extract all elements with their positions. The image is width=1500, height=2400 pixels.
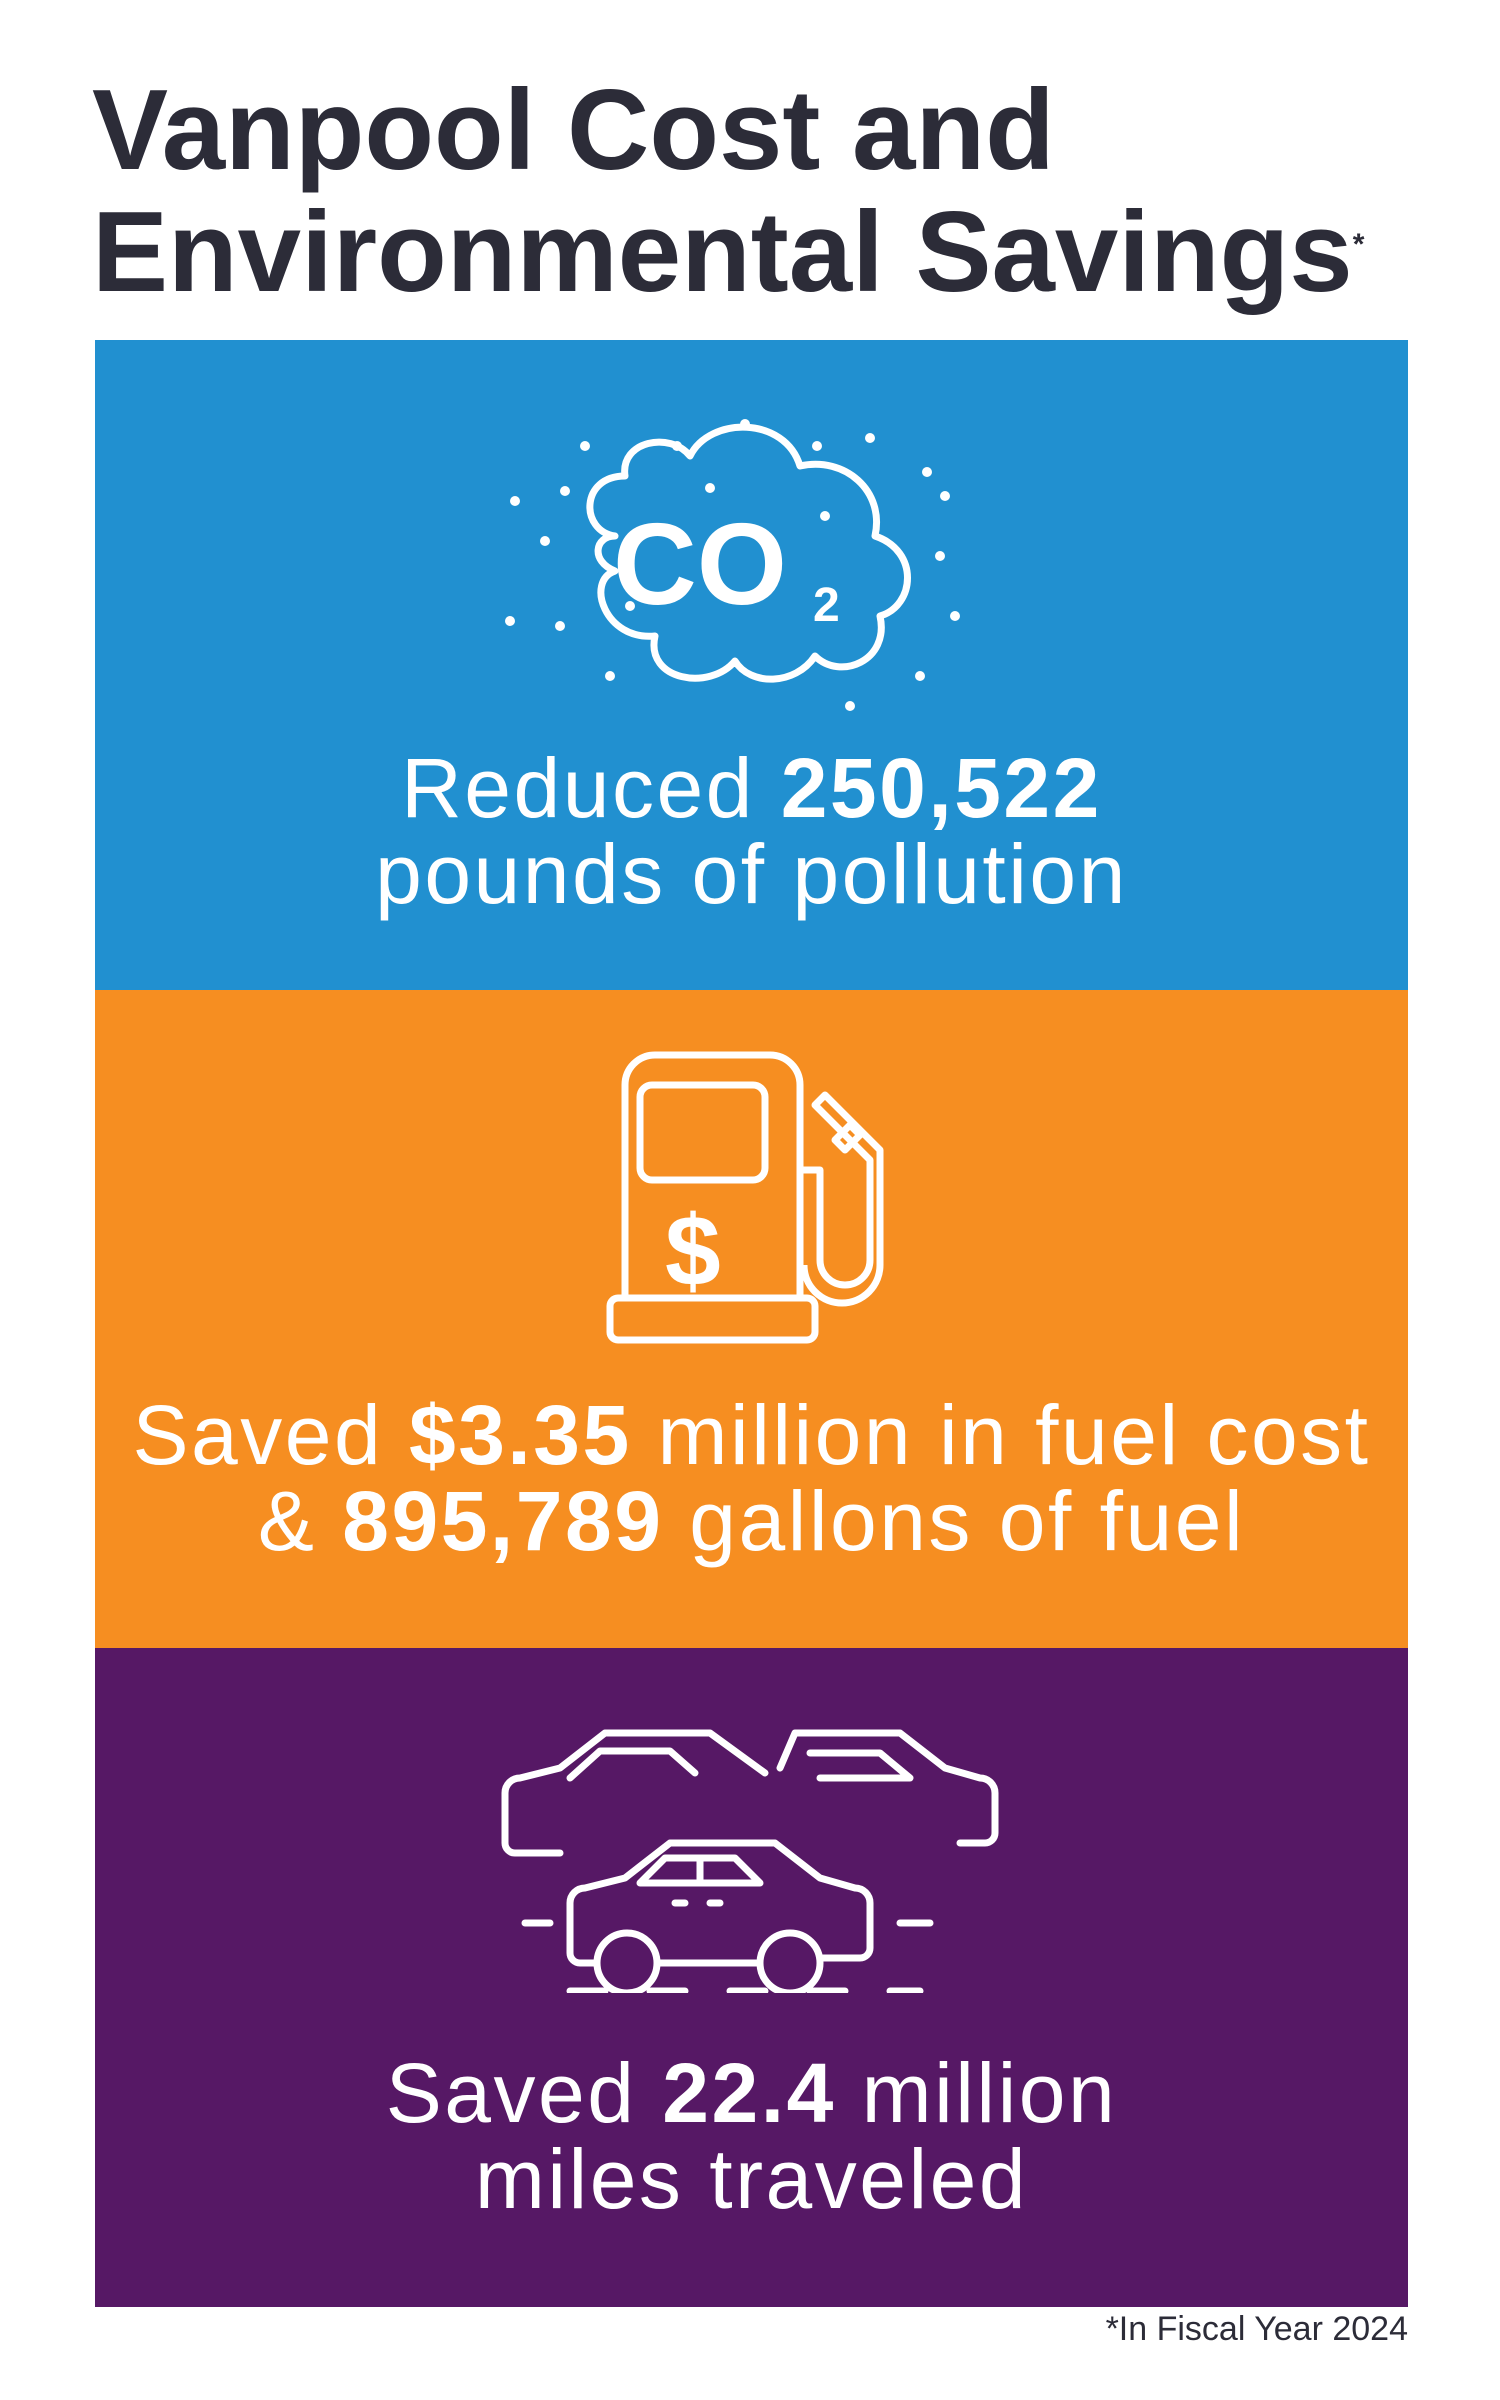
text: fuel stat — [132, 1388, 1370, 1568]
text: fuel stat: & 895,789 gallons of fuel — [258, 1474, 1245, 1568]
text: miles stat — [386, 2046, 1117, 2226]
text: pollution stat: Reduced 250,522 — [401, 741, 1102, 835]
icon: CO2 cloud: 2 — [813, 579, 840, 632]
text: fuel stat: Saved $3.35 million in fuel cost — [132, 1388, 1370, 1482]
text: miles stat: Saved 22.4 million — [386, 2046, 1117, 2140]
text: miles stat: miles traveled — [475, 2132, 1028, 2226]
title — [92, 67, 1364, 316]
text: pollution stat — [375, 741, 1128, 921]
panel: pollution — [95, 340, 1408, 990]
icon: cars — [502, 1730, 998, 1993]
panel: fuel — [95, 990, 1408, 1648]
title: Vanpool Cost and — [92, 67, 1055, 194]
icon: fuel pump — [606, 1052, 884, 1344]
icon: fuel pump: $ — [665, 1195, 721, 1307]
icon: CO2 cloud: CO — [613, 499, 787, 629]
footnote: *In Fiscal Year 2024 — [1106, 2310, 1408, 2348]
icon: CO2 cloud — [505, 419, 960, 711]
title: Environmental Savings* — [92, 189, 1364, 316]
text: pollution stat: pounds of pollution — [375, 827, 1128, 921]
panel: miles — [95, 1648, 1408, 2307]
